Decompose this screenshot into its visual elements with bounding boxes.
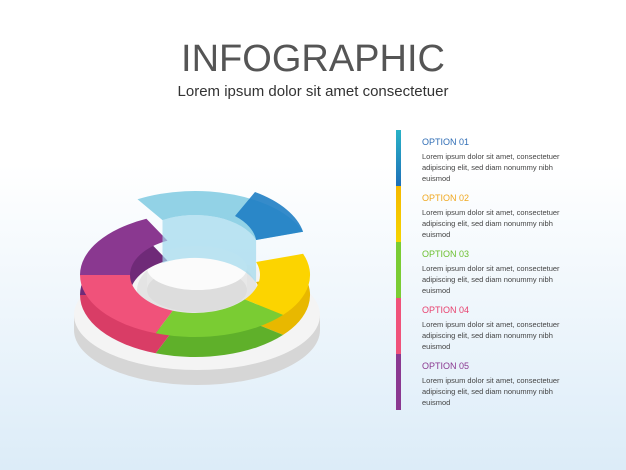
option 04: OPTION 04 (422, 305, 469, 315)
option 01: OPTION 01 (422, 137, 469, 147)
segment: pink (80, 275, 173, 333)
inner cylinder (137, 246, 257, 325)
option 03: OPTION 03 (422, 249, 469, 259)
segment: cyan/blue elevated (138, 191, 303, 283)
subtitle: Lorem ipsum dolor sit amet consectetuer (178, 83, 448, 100)
option 03 (422, 249, 560, 295)
option 01: Lorem ipsum dolor sit amet, consectetuer adipiscing elit, sed diam nonummy nibh euismod (422, 152, 560, 183)
base platform (74, 260, 320, 385)
option 02 (422, 193, 560, 239)
option 02: OPTION 02 (422, 193, 469, 203)
option 05 (422, 361, 560, 407)
segment sides (80, 239, 310, 357)
option 04: Lorem ipsum dolor sit amet, consectetuer adipiscing elit, sed diam nonummy nibh euismod (422, 320, 560, 351)
option 03: Lorem ipsum dolor sit amet, consectetuer adipiscing elit, sed diam nonummy nibh euismod (422, 264, 560, 295)
option 05: OPTION 05 (422, 361, 469, 371)
option 01 (422, 137, 560, 183)
option 05: Lorem ipsum dolor sit amet, consectetuer adipiscing elit, sed diam nonummy nibh euismod (422, 376, 560, 407)
segment: green (156, 299, 283, 337)
option 04 (422, 305, 560, 351)
option bar (396, 130, 401, 410)
title: INFOGRAPHIC (181, 38, 445, 80)
segment: purple (80, 219, 168, 275)
option 02: Lorem ipsum dolor sit amet, consectetuer adipiscing elit, sed diam nonummy nibh euismod (422, 208, 560, 239)
segment: yellow (245, 254, 310, 315)
